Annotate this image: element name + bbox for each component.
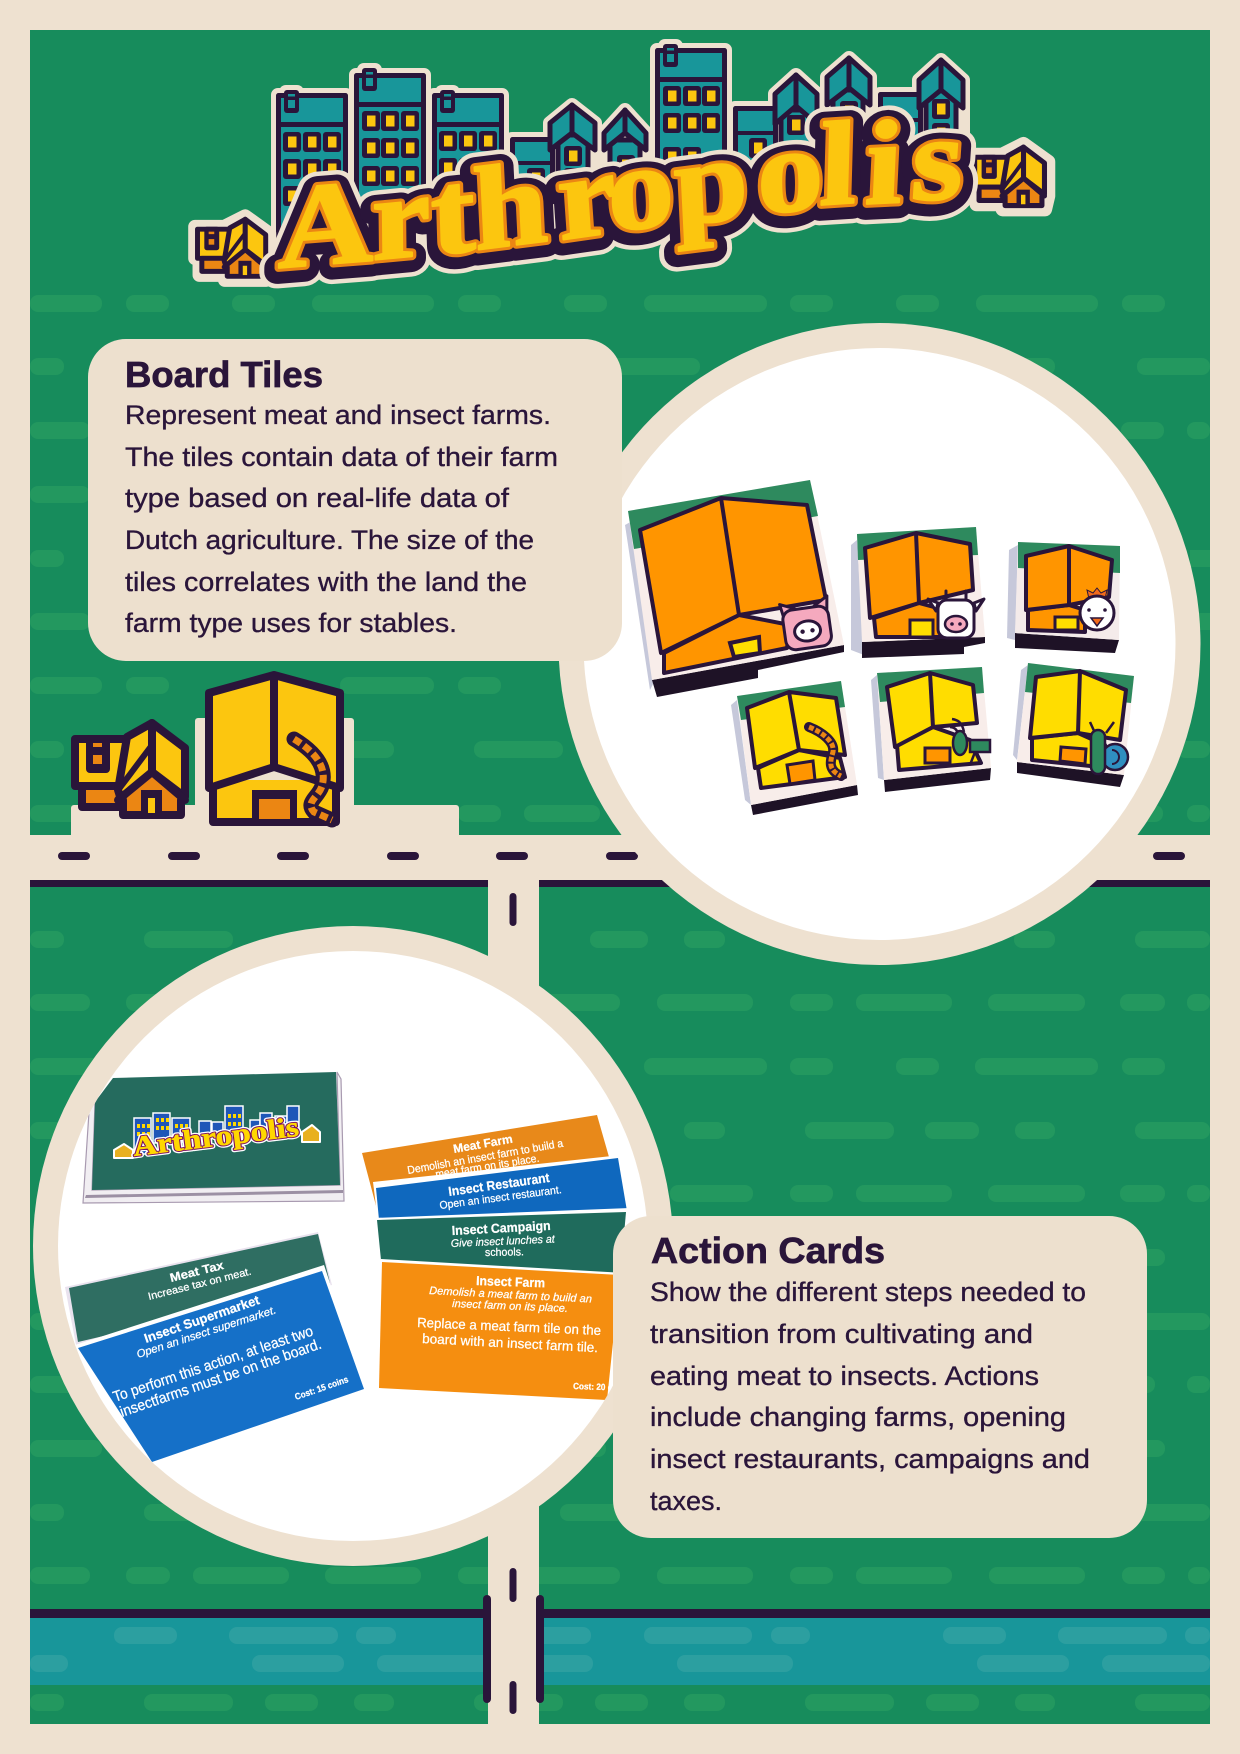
card: meat farm xyxy=(362,1115,609,1208)
panel: action cards photo circle xyxy=(33,926,673,1566)
card: insect farm: board with an insect farm tile. xyxy=(422,1331,598,1355)
farm plots on roadside xyxy=(71,718,459,840)
card: insect supermarket: insectfarms must be on the board. xyxy=(118,1336,324,1421)
card: insect campaign xyxy=(377,1208,628,1272)
field stripes xyxy=(30,295,1210,1584)
card: meat tax xyxy=(65,1232,332,1345)
logo wordmark: Arthropolis xyxy=(264,95,973,297)
mini logo: Arthropolis xyxy=(131,1112,301,1163)
mini logo: Arthropolis xyxy=(131,1112,301,1163)
card: insect supermarket: Insect Supermarket xyxy=(142,1292,262,1346)
text block: board tiles xyxy=(125,400,558,638)
card: insect farm: Replace a meat farm tile on the xyxy=(417,1315,601,1338)
tile: snail farm xyxy=(1013,663,1134,787)
panel: action cards text xyxy=(613,1216,1147,1538)
text block: board tiles: farm type uses for stables. xyxy=(125,608,457,638)
card: meat tax: Increase tax on meat. xyxy=(147,1266,253,1303)
card: meat farm: Meat Farm xyxy=(452,1132,514,1156)
text block: action cards: transition from cultivating and xyxy=(650,1319,1033,1349)
text block: action cards xyxy=(650,1277,1090,1516)
text block: board tiles: The tiles contain data of their farm xyxy=(125,442,558,472)
tile: pig farm large xyxy=(625,480,844,697)
icon: cow xyxy=(928,591,984,638)
text block: board tiles: Dutch agriculture. The size of the xyxy=(125,525,534,555)
logo wordmark: Arthropolis xyxy=(265,92,973,294)
mini logo xyxy=(114,1106,320,1163)
card deck with logo xyxy=(83,1072,344,1203)
card: meat tax: Meat Tax xyxy=(168,1258,225,1285)
text block: action cards: insect restaurants, campaigns and xyxy=(650,1444,1090,1474)
mini logo: Arthropolis xyxy=(131,1112,301,1163)
logo small house left xyxy=(195,216,269,280)
logo wordmark: Arthropolis xyxy=(264,95,973,297)
heading: action cards: Action Cards xyxy=(651,1230,885,1271)
vertical road and bridge xyxy=(483,880,544,1724)
card: insect farm xyxy=(376,1259,629,1408)
card: meat farm: meat farm on its place. xyxy=(435,1153,540,1181)
logo small house right xyxy=(972,144,1048,209)
card: insect campaign: Insect Campaign xyxy=(451,1218,551,1238)
card: insect restaurant: Insect Restaurant xyxy=(447,1170,551,1199)
icon: snail xyxy=(1090,722,1128,774)
horizontal road xyxy=(30,835,1210,887)
icon: pig xyxy=(779,596,834,651)
text block: board tiles: tiles correlates with the land the xyxy=(125,567,527,597)
logo cream outline xyxy=(278,46,963,255)
card: meat farm: Demolish an insect farm to build a xyxy=(406,1138,565,1177)
card: insect supermarket: Open an insect supermarket. xyxy=(135,1304,278,1361)
card: insect supermarket: Cost: 15 coins xyxy=(293,1374,350,1402)
card: insect restaurant: Open an insect restaurant. xyxy=(439,1184,562,1212)
text block: action cards: include changing farms, opening xyxy=(650,1402,1066,1432)
panel: board tiles photo circle xyxy=(558,323,1200,965)
icon: small house xyxy=(75,723,185,815)
card: insect restaurant xyxy=(373,1155,632,1222)
card: insect farm: Cost: 20 coins xyxy=(573,1381,629,1393)
icon: insect farm with worm xyxy=(209,675,340,826)
card: insect farm: Demolish a meat farm to build an xyxy=(429,1285,592,1306)
text block: action cards: Show the different steps needed to xyxy=(650,1277,1086,1307)
icon: grasshopper xyxy=(950,719,990,765)
logo: Arthropolis xyxy=(195,44,1048,297)
tile: grasshopper farm xyxy=(871,667,991,792)
card: insect supermarket xyxy=(75,1265,367,1467)
logo buildings xyxy=(276,44,963,250)
tile: cow farm xyxy=(851,527,985,658)
card: insect campaign: Give insect lunches at xyxy=(451,1233,556,1250)
card: insect farm: Insect Farm xyxy=(476,1273,545,1290)
heading: board tiles: Board Tiles xyxy=(125,354,323,395)
card: insect farm: insect farm on its place. xyxy=(452,1298,568,1315)
text block: action cards: taxes. xyxy=(650,1486,722,1516)
text block: board tiles: Represent meat and insect farms. xyxy=(125,400,551,430)
text block: board tiles: type based on real-life data of xyxy=(125,483,510,513)
card: insect supermarket: To perform this action, at least two xyxy=(111,1323,315,1406)
icon: worm xyxy=(809,727,841,776)
logo wordmark: Arthropolis xyxy=(265,92,973,294)
text block: action cards: eating meat to insects. Actions xyxy=(650,1361,1039,1391)
tile: chicken farm xyxy=(1007,542,1120,653)
tile: worm farm xyxy=(731,681,858,815)
card: insect campaign: schools. xyxy=(485,1246,524,1259)
icon: chicken xyxy=(1080,588,1114,630)
panel: board tiles text xyxy=(88,339,622,661)
river xyxy=(30,1609,1210,1711)
